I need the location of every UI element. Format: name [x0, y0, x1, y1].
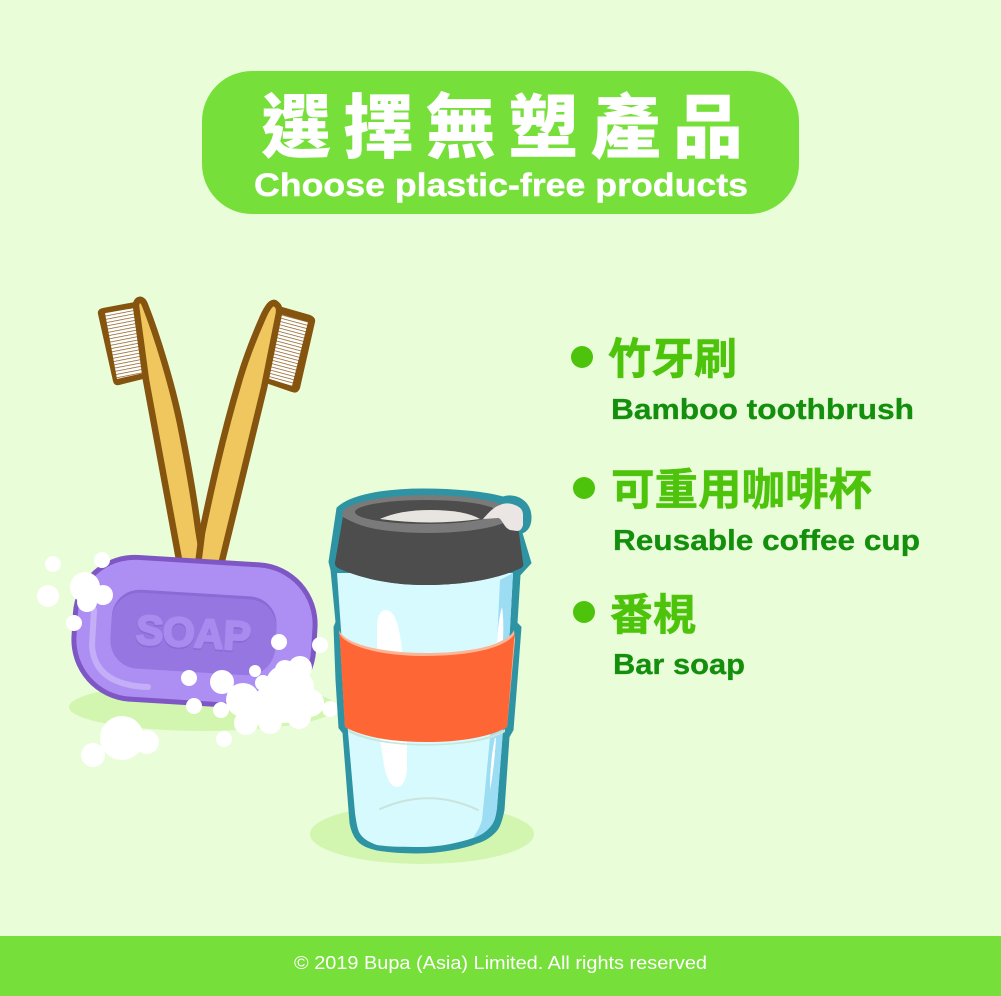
glass highlights	[377, 610, 407, 787]
title: English: Choose plastic-free products	[254, 167, 748, 203]
sleeve	[348, 729, 505, 746]
label English: Bar soap	[613, 649, 745, 681]
title banner	[202, 71, 799, 214]
copyright: © 2019 Bupa (Asia) Limited. All rights reserved	[294, 953, 707, 973]
bullet	[571, 346, 593, 368]
cup base line	[380, 798, 478, 810]
label Chinese: 可重用咖啡杯	[611, 467, 872, 515]
cup outline	[329, 489, 531, 853]
soap foam bubbles	[37, 552, 338, 767]
soap shadow	[69, 683, 337, 731]
title: Chinese: 選擇無塑產品	[261, 89, 743, 167]
lid opening	[380, 510, 480, 522]
glass body	[337, 573, 513, 847]
lid knob	[483, 503, 523, 531]
list item: reusable coffee cup	[573, 467, 920, 557]
lid	[335, 510, 523, 585]
right toothbrush	[198, 303, 314, 565]
bullet	[573, 601, 595, 623]
footer bar	[0, 936, 1001, 996]
glass shading	[473, 573, 513, 838]
left toothbrush	[99, 300, 204, 565]
label Chinese: 番梘	[610, 592, 696, 640]
label English: Reusable coffee cup	[613, 525, 920, 557]
cup shadow	[310, 804, 534, 864]
icon: soap bar	[68, 551, 321, 713]
bullet	[573, 477, 595, 499]
list item: bamboo toothbrush	[571, 336, 914, 426]
soap label: SOAP	[135, 608, 252, 661]
label English: Bamboo toothbrush	[611, 394, 914, 426]
soap label: SOAP	[135, 607, 252, 659]
label Chinese: 竹牙刷	[608, 336, 737, 384]
soap recess	[109, 588, 278, 676]
list item: bar soap	[573, 592, 745, 681]
icon: reusable coffee cup	[329, 489, 531, 853]
icon: bamboo toothbrushes	[99, 300, 314, 565]
